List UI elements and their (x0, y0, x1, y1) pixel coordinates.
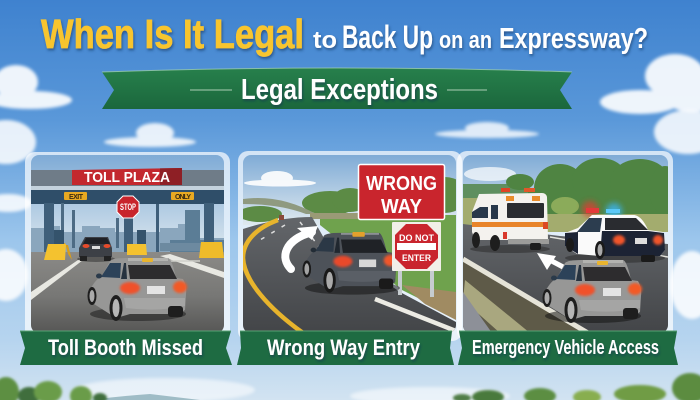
toll canopy (31, 170, 224, 256)
banner: Legal Exceptions (102, 68, 572, 109)
sign: exit: EXIT (69, 194, 84, 201)
sign: wrong way (358, 164, 444, 220)
overpass (243, 198, 316, 214)
main title (41, 11, 648, 57)
main title: Back Up (342, 19, 433, 55)
panel: Emergency Vehicle Access (0, 151, 700, 400)
sign: exit (64, 192, 87, 201)
ribbon: Toll Booth Missed: Toll Booth Missed (48, 335, 203, 360)
road (463, 224, 668, 333)
skyline (31, 224, 224, 253)
police car (565, 201, 665, 263)
banner: Legal Exceptions: Legal Exceptions (241, 74, 438, 106)
barrier line (463, 259, 588, 333)
tree line along bottom edge (0, 373, 700, 400)
sign: do not enter (392, 222, 441, 271)
arrow: wrong way direction (285, 226, 318, 269)
sign: wrong way: WAY (381, 196, 423, 218)
ribbon: Emergency Vehicle Access (458, 331, 678, 365)
arrow: toward emergency vehicles (537, 253, 565, 270)
sign: only (171, 192, 194, 201)
treeline (238, 177, 467, 222)
ribbon: Wrong Way Entry: Wrong Way Entry (267, 335, 421, 360)
panel: Toll Booth Missed (25, 152, 230, 342)
icon: stop sign: STOP (120, 202, 136, 212)
grass (463, 198, 668, 232)
ambulance (470, 188, 550, 253)
roadside gutter (463, 258, 578, 330)
road (243, 217, 456, 333)
grass (320, 215, 456, 298)
sign: do not enter: DO NOT (399, 233, 434, 244)
post (430, 270, 434, 297)
sign: wrong way: WRONG (366, 173, 437, 195)
sign: only: ONLY (175, 194, 191, 201)
panel: Wrong Way Entry (0, 151, 700, 400)
car: dark rear view, wrong way (303, 232, 400, 295)
car: silver rear view, emergency lane (542, 260, 642, 323)
sign: toll plaza: TOLL PLAZA (84, 169, 170, 186)
icon: stop sign (117, 196, 139, 218)
treeline (463, 158, 681, 214)
distant hill (88, 394, 200, 400)
ribbon: Wrong Way Entry (237, 331, 454, 365)
center line (243, 220, 303, 333)
sign: do not enter: ENTER (402, 253, 431, 264)
edge stripe (375, 299, 456, 331)
ribbon: Toll Booth Missed (20, 331, 232, 365)
main title: When Is It Legal (41, 11, 304, 57)
road (31, 252, 224, 333)
distant car (77, 237, 115, 262)
main title: to (313, 27, 337, 54)
main title: on an (439, 27, 492, 54)
main title: Expressway? (499, 23, 648, 55)
car: silver rear view, toll lane (88, 258, 187, 321)
barriers (47, 243, 72, 260)
